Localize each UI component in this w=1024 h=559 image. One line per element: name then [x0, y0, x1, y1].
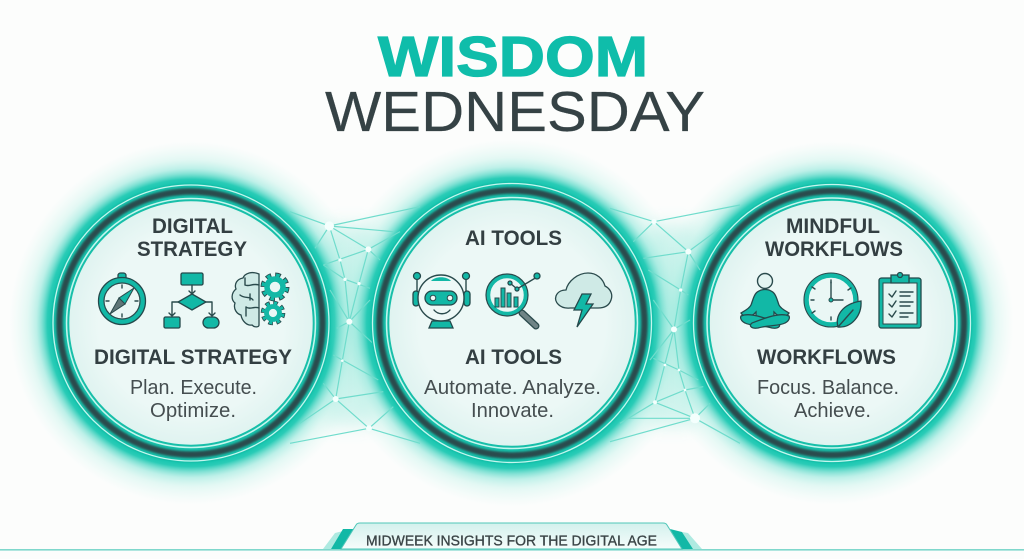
icon: cloud with lightning	[556, 273, 612, 327]
icon: flowchart	[164, 273, 219, 328]
icon: compass	[98, 273, 146, 324]
heading: mindful workflows	[765, 214, 903, 261]
icon: magnifier chart	[486, 273, 540, 326]
glow behind circles	[9, 139, 1014, 507]
description	[757, 377, 899, 422]
icon: meditation	[741, 274, 789, 328]
footer banner	[0, 523, 1024, 551]
description: Innovate.	[471, 400, 554, 422]
icon: robot	[413, 272, 470, 328]
title line: WEDNESDAY: WEDNESDAY	[325, 80, 705, 144]
heading: digital strategy: DIGITAL	[152, 214, 233, 238]
description: Plan. Execute.	[130, 377, 257, 399]
description: Automate. Analyze.	[424, 377, 601, 399]
heading: mindful workflows: WORKFLOWS	[765, 237, 903, 261]
label: digital strategy: DIGITAL STRATEGY	[94, 345, 292, 369]
panel: digital strategy	[51, 183, 331, 463]
tagline: MIDWEEK INSIGHTS FOR THE DIGITAL AGE	[366, 532, 657, 550]
network connections: right gap	[610, 205, 740, 443]
panel: workflows	[692, 182, 972, 464]
description	[424, 377, 601, 422]
description: Focus. Balance.	[757, 377, 899, 399]
description: Achieve.	[794, 400, 871, 422]
title	[325, 25, 705, 144]
network nodes: left gap	[325, 221, 372, 431]
heading: mindful workflows: MINDFUL	[786, 214, 880, 238]
description	[130, 377, 257, 422]
heading: ai tools: AI TOOLS	[465, 226, 562, 250]
icon: brain and gears	[232, 273, 287, 327]
label: ai tools: AI TOOLS	[465, 345, 562, 369]
heading: digital strategy	[137, 214, 247, 261]
description: Optimize.	[150, 400, 236, 422]
label: workflows: WORKFLOWS	[757, 345, 896, 369]
heading: digital strategy: STRATEGY	[137, 237, 247, 261]
title line: WISDOM: WISDOM	[378, 25, 648, 89]
network connections: left gap	[290, 207, 420, 443]
panel: ai tools	[370, 182, 654, 464]
icon: clock with leaf	[804, 273, 861, 327]
icon: clipboard checklist	[879, 272, 921, 328]
network nodes: right gap	[651, 219, 700, 423]
